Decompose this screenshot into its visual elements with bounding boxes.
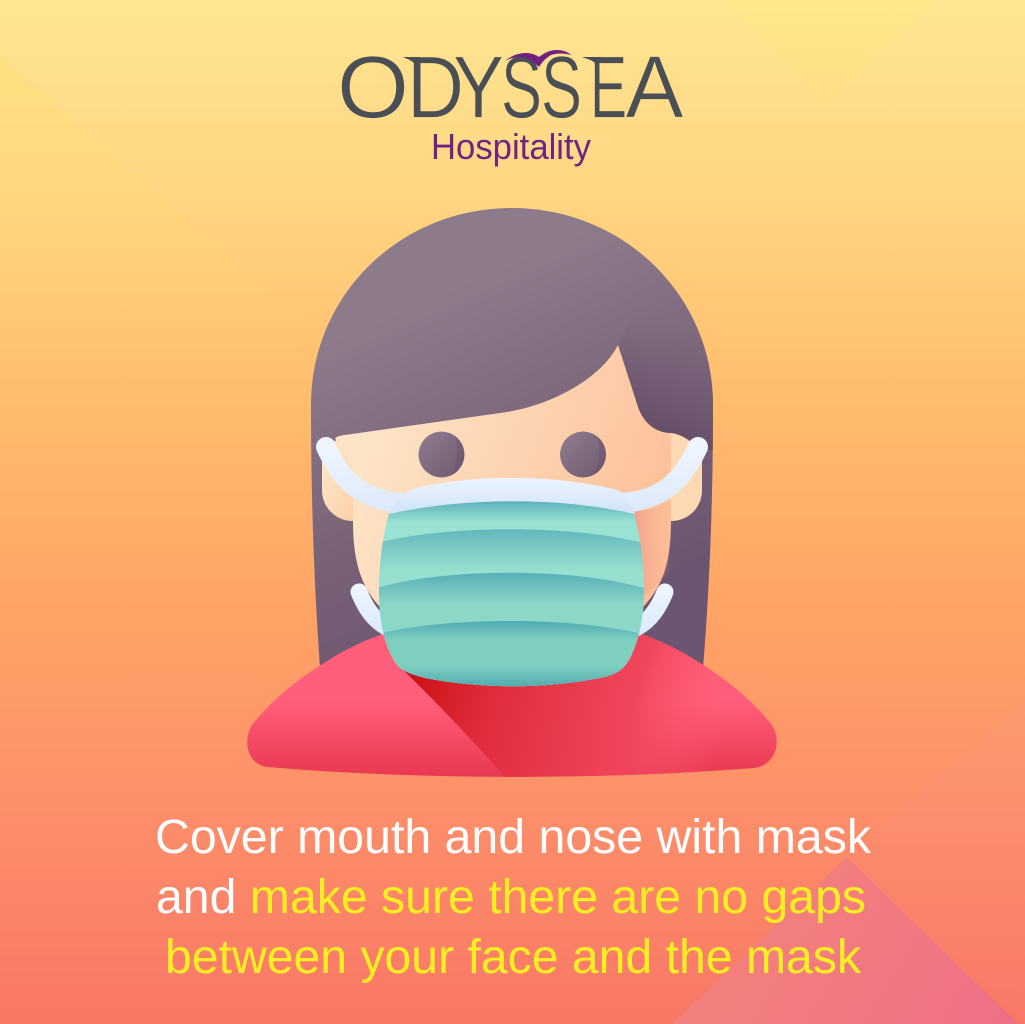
right eye <box>560 432 606 478</box>
character illustration <box>247 208 790 778</box>
upper left strap <box>326 447 400 503</box>
lower left strap <box>359 592 388 628</box>
caption line 1: Cover mouth and nose with mask <box>155 811 872 864</box>
logo wordmark: O <box>337 38 409 136</box>
logo wordmark: S <box>501 38 542 136</box>
left eye <box>418 432 464 478</box>
body: red top <box>247 634 777 777</box>
logo wordmark: D <box>407 38 464 136</box>
mask pleat 3 <box>379 572 644 686</box>
caption line 2: and make sure there are no gaps <box>156 871 866 924</box>
logo wordmark: S <box>541 38 582 136</box>
logo <box>337 38 684 167</box>
mask nose band <box>389 478 635 514</box>
back hair shading <box>620 348 713 450</box>
left ear <box>322 435 353 521</box>
collar shadow <box>404 634 703 777</box>
logo wordmark: Y <box>453 38 504 136</box>
caption line 3: between your face and the mask <box>165 931 862 984</box>
caption <box>155 811 872 984</box>
mask pleat 4 <box>383 621 639 686</box>
background shape: bottom right <box>672 857 1018 1024</box>
upper right strap <box>624 447 698 503</box>
surgical mask <box>379 478 644 686</box>
mask pleat 1 <box>379 501 644 686</box>
face <box>335 345 671 650</box>
logo letter serifs <box>403 57 601 63</box>
background shape: top right <box>725 0 935 102</box>
logo wordmark: E <box>590 38 627 136</box>
logo wordmark: A <box>626 38 684 136</box>
hair <box>311 208 713 668</box>
mask shadow on cheek <box>632 506 671 600</box>
mask pleat 2 <box>379 529 644 686</box>
lower right strap <box>636 592 665 628</box>
right ear <box>671 433 702 521</box>
background shape: right facet <box>847 700 1025 1024</box>
logo subtitle: Hospitality <box>431 126 591 167</box>
background shape: top left <box>0 57 330 400</box>
logo bird <box>505 50 571 67</box>
